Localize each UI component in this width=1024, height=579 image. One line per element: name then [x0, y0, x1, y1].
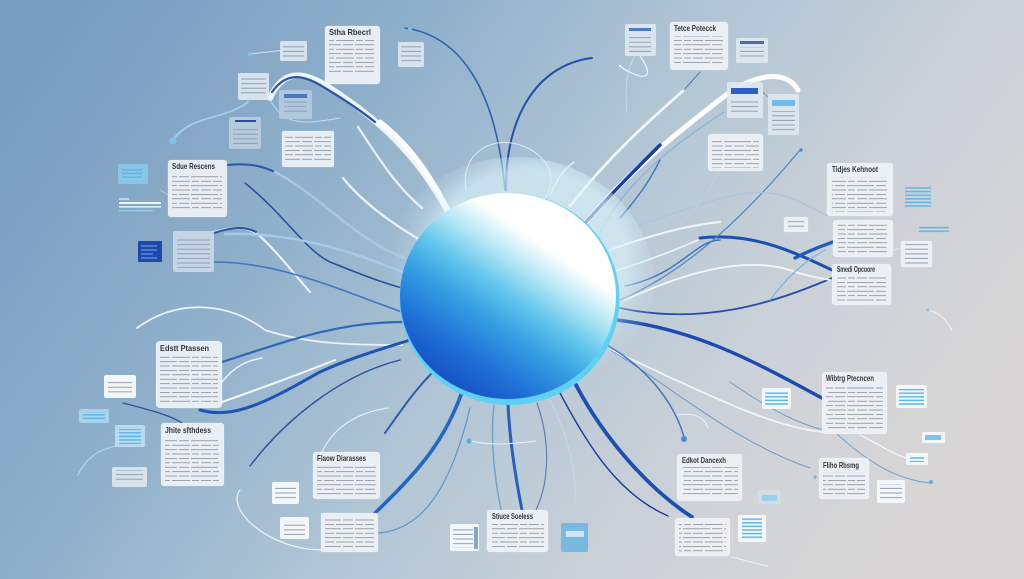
icon: document left: [238, 73, 269, 100]
panel: lower left card: [156, 341, 222, 408]
faint loop above sphere: [465, 142, 551, 198]
heading: Smedi Opcoore: [837, 264, 875, 274]
icon: document blue lines right: [896, 385, 927, 408]
icon: document bottom centre: [450, 524, 479, 551]
heading: Tidjes Kehnoot: [832, 164, 878, 174]
icon: small sky tag: [922, 432, 945, 443]
icon: small note: [784, 217, 808, 232]
icon: document lower right: [877, 480, 905, 503]
heading: Wibtrg Ptecncen: [826, 373, 874, 383]
icon: small sky note: [758, 490, 781, 504]
icon: document top right: [736, 38, 768, 63]
icon: large document: [173, 231, 214, 272]
icon: document right: [901, 241, 932, 267]
icon: small sky tag lower: [906, 453, 928, 465]
panel: lower right card A: [677, 454, 742, 501]
panel: bottom left card: [161, 423, 224, 486]
icon: document small top: [280, 41, 307, 61]
panel: right card one: [827, 163, 893, 216]
icon: sky blue lines: [905, 187, 931, 207]
heading: Sdue Rescens: [172, 161, 215, 171]
panel: upper left headed card: [325, 26, 380, 84]
panel: text card upper right: [708, 134, 763, 171]
icon: blue document: [115, 425, 145, 447]
icon: document far left: [104, 375, 136, 398]
network lines: [78, 28, 952, 566]
heading: Flaow Diarasses: [317, 453, 366, 463]
icon: blue folder: [561, 523, 588, 552]
bottom curves: [375, 385, 768, 566]
icon: document top: [625, 24, 656, 56]
icon: document bottom B: [280, 517, 309, 539]
icon: light lines: [119, 198, 161, 212]
right curves: [607, 150, 952, 483]
upper right curves: [570, 55, 798, 232]
heading: Edkot Dancexh: [682, 455, 726, 465]
icon: blue lines document: [738, 515, 766, 542]
upper left curves: [173, 28, 592, 312]
panel: bottom card B: [321, 513, 378, 552]
heading: Edstt Ptassen: [160, 343, 209, 353]
left curves: [78, 190, 431, 550]
panel: top right card: [670, 22, 728, 70]
panel: bottom card A: [313, 452, 380, 499]
icon: document blue header: [727, 82, 763, 118]
icon: document bottom A: [272, 482, 299, 504]
icon: document dark lines: [229, 117, 261, 149]
panel: right card two: [833, 220, 893, 257]
central sphere: [378, 157, 654, 413]
panel: lower right card D: [819, 458, 869, 499]
panel: left card: [168, 160, 227, 217]
icon: dark blue note: [138, 241, 162, 262]
icon: blue note right: [762, 388, 791, 409]
icon: light blue tag: [118, 164, 148, 184]
heading: Stiuce Soeless: [492, 511, 533, 521]
panel: bottom centre card: [487, 510, 548, 552]
panel: lower right card B: [675, 518, 730, 556]
panel: right card three: [832, 264, 891, 305]
icon: blue tag far left: [79, 409, 109, 423]
node dots: [169, 27, 933, 484]
heading: Stha Rbecrl: [329, 27, 371, 37]
icon: document top centre left: [398, 42, 424, 67]
heading: Fliho Rbsmg: [823, 460, 859, 470]
icon: document with blue header: [279, 90, 312, 119]
icon: document sky header: [768, 94, 799, 135]
icon: document bottom left: [112, 467, 147, 487]
icon: sky blue strip: [919, 225, 949, 233]
heading: Tetce Potecck: [674, 23, 716, 33]
panel: lower right card C: [822, 372, 887, 434]
panel: text card upper left: [282, 131, 334, 167]
heading: Jhite sfthdess: [165, 425, 211, 435]
